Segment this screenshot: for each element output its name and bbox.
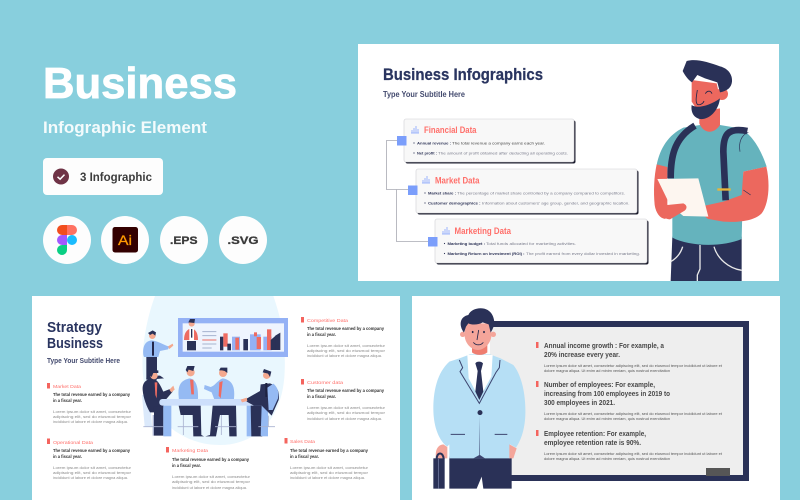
connector lines bbox=[386, 140, 428, 242]
panel: business infographics bbox=[358, 44, 779, 281]
item: number of employees: 300 employees in 2021. bbox=[544, 398, 615, 407]
subheading: Type Your Subtitle Here bbox=[47, 358, 120, 365]
text block: customer data: in a fiscal year. bbox=[307, 394, 336, 399]
text block: sales data: The total revenue earned by a company bbox=[290, 448, 369, 453]
item: number of employees bbox=[536, 380, 723, 421]
panel: key metrics board bbox=[412, 296, 780, 500]
item: number of employees: increasing from 100 employees in 2019 to bbox=[544, 389, 670, 398]
item: employee retention: Lorem ipsum dolor sit amet, consectetur adipiscing elit, sed do eiusmod tempor incididunt ut labore et bbox=[544, 451, 723, 456]
item: annual income growth: dolore magna aliqua. Ut enim ad minim veniam, quis nostrud exercitation bbox=[544, 368, 670, 373]
icon: svg bbox=[219, 216, 267, 264]
text block: marketing data: Lorem ipsum dolor sit amet, consectetur bbox=[172, 475, 251, 479]
text block: customer data bbox=[301, 379, 386, 421]
panel: strategy business bbox=[32, 296, 400, 500]
text block: customer data: adipiscing elit, sed do eiusmod tempor bbox=[307, 411, 386, 415]
text block: sales data: adipiscing elit, sed do eiusmod tempor bbox=[290, 471, 369, 475]
heading: strategy business bbox=[47, 319, 103, 352]
text block: sales data: incididunt ut labore et dolore magna aliqua. bbox=[290, 476, 365, 480]
card: marketing data bbox=[428, 219, 648, 264]
card: marketing data: Marketing budget : bbox=[448, 241, 485, 246]
text block: market data: The total revenue earned by a company bbox=[53, 392, 131, 397]
item: employee retention: Employee retention: For example, bbox=[544, 429, 646, 438]
text block: market data: adipiscing elit, sed do eiusmod tempor bbox=[53, 415, 132, 419]
icon: eps bbox=[160, 216, 208, 264]
icon: figma bbox=[43, 216, 91, 264]
item: annual income growth: Annual income growth : For example, a bbox=[544, 341, 665, 350]
seated figure centre left bbox=[178, 366, 204, 436]
card: marketing data: The profit earned from every dollar invested in marketing. bbox=[526, 251, 640, 256]
text block: competitive data: adipiscing elit, sed do eiusmod tempor bbox=[307, 349, 386, 353]
text block: competitive data bbox=[301, 317, 386, 358]
icon: eps: .EPS bbox=[170, 235, 198, 247]
seated figure far left bbox=[142, 370, 175, 436]
subtitle: Infographic Element bbox=[43, 119, 208, 137]
chart board bbox=[178, 318, 288, 357]
text block: operational data: Operational Data bbox=[53, 440, 93, 446]
text block: operational data: incididunt ut labore et dolore magna aliqua. bbox=[53, 476, 128, 480]
badge: 3 infographic bbox=[43, 158, 163, 195]
card: market data: Information about customers' age group, gender, and geographic location. bbox=[482, 200, 630, 206]
text block: customer data: Lorem ipsum dolor sit amet, consectetur bbox=[307, 406, 386, 410]
text block: marketing data: adipiscing elit, sed do eiusmod tempor bbox=[172, 480, 251, 484]
item: number of employees: dolore magna aliqua. Ut enim ad minim veniam, quis nostrud exercitation bbox=[544, 416, 670, 421]
text block: marketing data: The total revenue earned by a company bbox=[172, 457, 250, 462]
item: employee retention bbox=[536, 429, 723, 461]
text block: market data: Market Data bbox=[53, 384, 81, 390]
text block: competitive data: Lorem ipsum dolor sit amet, consectetur bbox=[307, 344, 386, 348]
text block: competitive data: The total revenue earned by a company bbox=[307, 326, 385, 331]
text block: customer data: Customer data bbox=[307, 380, 343, 386]
illustration: man in blue suit bbox=[433, 308, 525, 489]
text block: marketing data: Marketing Data bbox=[172, 448, 208, 454]
card: market data: The percentage of market share controlled by a company compared to competitors. bbox=[457, 190, 625, 196]
card: financial data: The amount of profit obtained after deducting all operating costs. bbox=[438, 150, 568, 156]
item: number of employees: Lorem ipsum dolor sit amet, consectetur adipiscing elit, sed do eiusmod tempor incididunt ut labore et bbox=[544, 411, 723, 416]
item: number of employees: Number of employees: For example, bbox=[544, 380, 655, 389]
heading: strategy business: Strategy bbox=[47, 319, 103, 336]
text block: operational data: adipiscing elit, sed do eiusmod tempor bbox=[53, 471, 132, 475]
text block: customer data: The total revenue earned by a company bbox=[307, 388, 385, 393]
text block: customer data: incididunt ut labore et dolore magna aliqua. bbox=[307, 417, 382, 421]
badge: 3 infographic: 3 Infographic bbox=[80, 172, 153, 184]
item: employee retention: dolore magna aliqua. Ut enim ad minim veniam, quis nostrud exercitation bbox=[544, 456, 670, 461]
item: annual income growth: Lorem ipsum dolor sit amet, consectetur adipiscing elit, sed do eiusmod tempor incididunt ut labore et bbox=[544, 363, 723, 368]
text block: sales data: in a fiscal year. bbox=[290, 454, 319, 459]
text block: market data: in a fiscal year. bbox=[53, 398, 82, 403]
card: marketing data: Total funds allocated for marketing activities. bbox=[486, 241, 576, 246]
card: market data: Market share : bbox=[428, 190, 456, 196]
text block: competitive data: in a fiscal year. bbox=[307, 332, 336, 337]
item: annual income growth bbox=[536, 341, 723, 373]
illustration: business meeting bbox=[142, 296, 288, 445]
text block: market data: Lorem ipsum dolor sit amet, consectetur bbox=[53, 410, 132, 414]
card: market data: Market Data bbox=[435, 176, 480, 186]
text block: marketing data: incididunt ut labore et dolore magna aliqua. bbox=[172, 486, 247, 490]
item: employee retention: employee retention rate is 90%. bbox=[544, 438, 641, 447]
icon: adobe illustrator: Ai bbox=[118, 232, 132, 248]
text block: market data bbox=[47, 383, 132, 424]
seated figure centre right bbox=[204, 368, 237, 436]
card: financial data: Net profit : bbox=[417, 150, 437, 156]
text block: sales data bbox=[284, 438, 369, 480]
panel subheading: Type Your Subtitle Here bbox=[383, 90, 465, 99]
card: market data bbox=[408, 169, 638, 214]
text block: sales data: Lorem ipsum dolor sit amet, consectetur bbox=[290, 466, 369, 470]
text block: sales data: Sales Data bbox=[290, 439, 315, 445]
icon: svg: .SVG bbox=[228, 235, 258, 247]
heading: strategy business: Business bbox=[47, 335, 103, 352]
text block: market data: incididunt ut labore et dolore magna aliqua. bbox=[53, 420, 128, 424]
text block: operational data: Lorem ipsum dolor sit amet, consectetur bbox=[53, 466, 132, 470]
illustration: man with clipboard bbox=[654, 60, 769, 281]
card: marketing data: Marketing Return on Investment (ROI) : bbox=[448, 251, 524, 256]
item: annual income growth: 20% increase every year. bbox=[544, 350, 620, 359]
card: market data: Customer demographics : bbox=[428, 200, 480, 206]
presentation board bbox=[490, 321, 749, 481]
card: financial data bbox=[397, 119, 576, 164]
text block: operational data bbox=[47, 438, 132, 480]
title: Business bbox=[43, 59, 237, 108]
text block: competitive data: incididunt ut labore et dolore magna aliqua. bbox=[307, 354, 382, 358]
card: financial data: Annual revenue : bbox=[417, 140, 451, 146]
text block: marketing data bbox=[166, 447, 251, 490]
card: financial data: The total revenue a company earns each year. bbox=[452, 140, 545, 146]
seated figure far right bbox=[241, 369, 279, 436]
text block: operational data: in a fiscal year. bbox=[53, 454, 82, 459]
text block: operational data: The total revenue earned by a company bbox=[53, 448, 131, 453]
card: financial data: Financial Data bbox=[424, 125, 477, 135]
text block: competitive data: Competitive Data bbox=[307, 318, 348, 324]
presenter standing bbox=[143, 330, 173, 380]
text block: marketing data: in a fiscal year. bbox=[172, 463, 201, 468]
meeting table bbox=[159, 399, 270, 436]
card: marketing data: Marketing Data bbox=[454, 226, 512, 236]
panel heading: Business Infographics bbox=[383, 66, 543, 84]
left cover column bbox=[43, 59, 267, 264]
icon: adobe illustrator bbox=[101, 216, 149, 264]
